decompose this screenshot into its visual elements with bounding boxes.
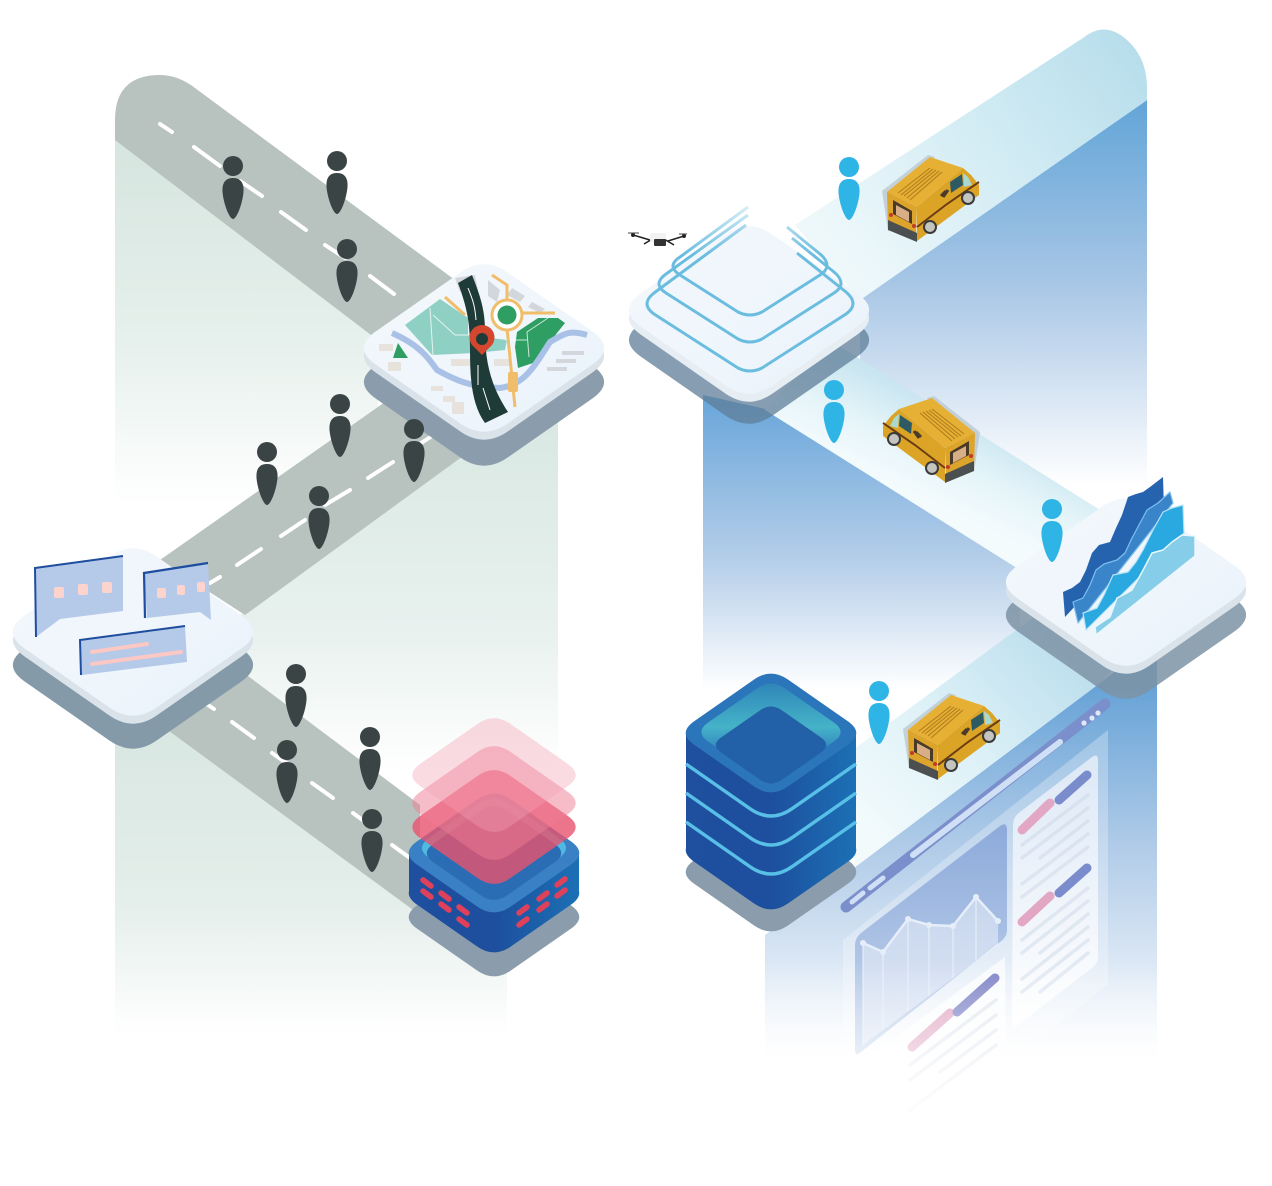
map: location pin [469,325,494,355]
platform edge [1006,506,1246,674]
platform: stacked area chart [1006,477,1246,699]
platform edge [13,556,253,724]
grey people on roads [222,151,425,872]
icon: van top [882,155,979,242]
stack separators [686,764,856,874]
map: parks [405,299,507,355]
map: roundabout [492,300,522,330]
area chart ribbons [1063,477,1195,635]
shadow [409,858,579,976]
shadow [686,813,856,931]
speech bubble left [35,556,123,637]
icon: van bottom [903,693,1000,780]
platform: map [364,264,604,466]
stack top [686,674,856,792]
road 1 dashes [160,124,394,294]
platform top [629,226,869,394]
red layer top [412,718,576,832]
red layer bottom [412,770,576,884]
grey road: top [115,75,455,338]
blue road: bottom [850,598,1140,867]
speech bubble right [144,563,211,620]
map artwork [379,275,587,423]
grey road: bottom [165,640,420,915]
platform top [364,264,604,432]
lower text card [855,957,1006,1150]
icon: drone [628,233,687,246]
server top [409,794,579,912]
shadow [364,298,604,466]
icon: van middle [883,396,980,483]
blue road: top [795,29,1147,300]
map: main road [458,275,508,423]
server body [409,834,579,952]
server with red layers [409,718,579,976]
stack body [686,733,856,909]
browser toolbar [846,704,1105,907]
shadow [1006,531,1246,699]
platform: layered rings [629,207,869,424]
right text card [1012,756,1098,1027]
red layer middle [412,746,576,860]
page panel [843,730,1108,1186]
road 3 dashes [205,703,410,858]
blue people on roads [823,157,1063,744]
bottom fade over mockup and wall [760,960,1160,1160]
server vents [423,879,565,925]
line chart panel [855,824,1007,1054]
road 2 dashes [210,436,432,583]
platform top [1006,498,1246,666]
right blue walls [703,100,1157,1060]
dashboard mockup [843,704,1108,1186]
left green walls [115,130,558,1035]
database stack [686,674,856,931]
map: yellow streets [445,275,555,407]
platform: messages [13,548,253,749]
map: river [392,333,587,388]
message card [80,626,187,675]
shadow [13,581,253,749]
platform top [13,548,253,716]
shadow [629,256,869,424]
platform edge [364,272,604,440]
blue road: middle [765,340,1100,570]
rings [647,207,853,371]
platform edge [629,234,869,402]
grey road: middle [160,395,485,615]
